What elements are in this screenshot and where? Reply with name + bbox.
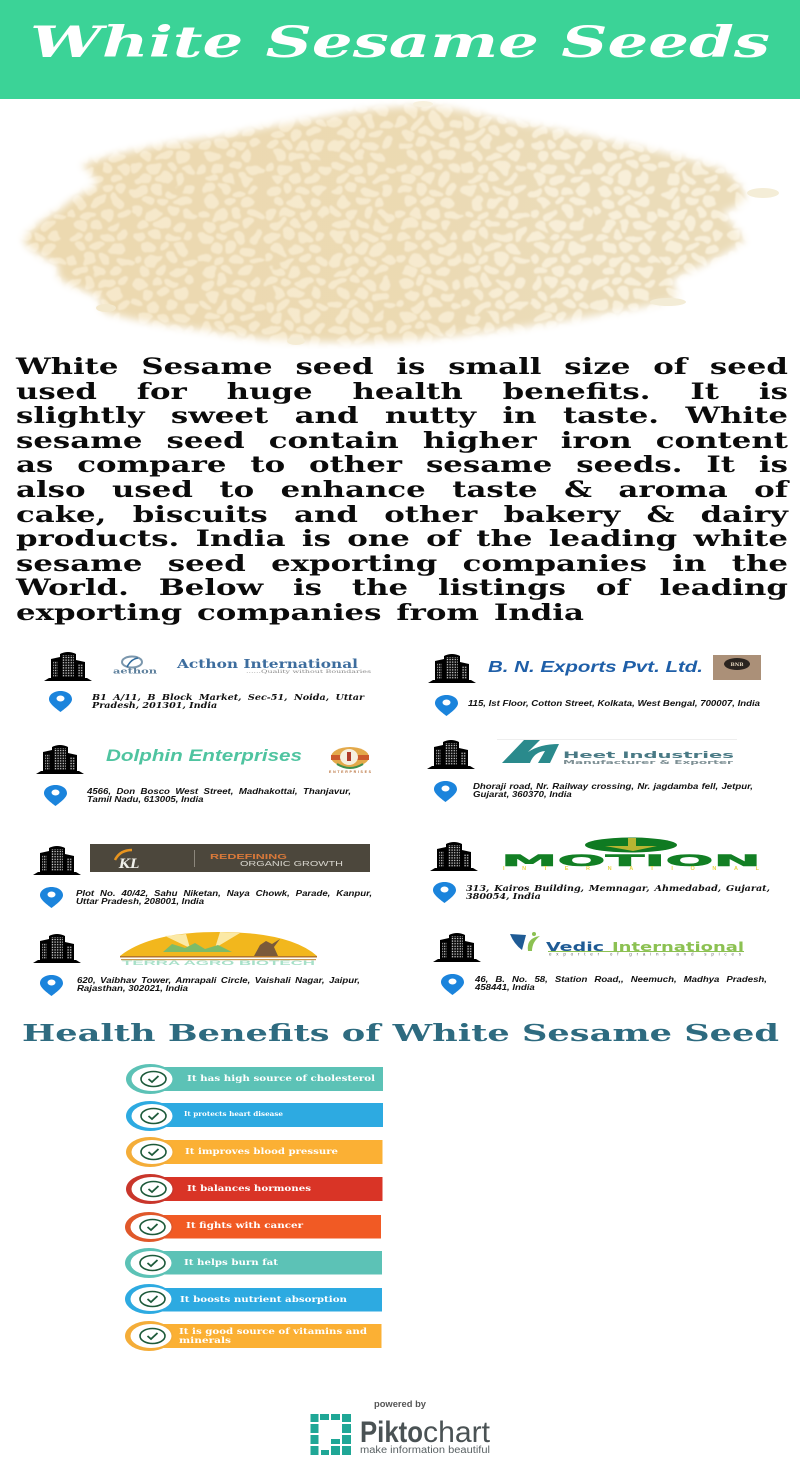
benefit 6: It helps burn fat [184, 1257, 278, 1267]
footer: powered by Piktochart [310, 1399, 491, 1456]
panel: Dolphin Enterprises [36, 745, 372, 806]
intro paragraph: sesame seed exporting companies in the [16, 551, 788, 577]
benefit 7: It boosts nutrient absorption [180, 1294, 347, 1304]
benefit 6 [125, 1248, 382, 1278]
benefit 1 [126, 1064, 383, 1094]
intro paragraph [16, 354, 790, 626]
title banner [0, 0, 800, 99]
panel: benefits list [125, 1064, 383, 1351]
address: Gujarat, 360370, India [473, 790, 572, 799]
title banner: White Sesame Seeds [30, 18, 770, 68]
panel: Heet Industries: Heet Industries [563, 751, 734, 761]
panel: B. N. Exports: B. N. Exports Pvt. Ltd. [488, 659, 703, 676]
address: 380054, India [466, 891, 541, 901]
benefit 3: It improves blood pressure [185, 1146, 338, 1156]
address [77, 976, 360, 993]
panel: Vedic International: International [612, 940, 744, 954]
panel: KL Agro [33, 844, 372, 908]
benefit 7 [125, 1284, 382, 1314]
panel: Vedic International: Vedic [546, 940, 604, 954]
heading: health benefits: Health Benefits of White Sesame Seed [22, 1020, 779, 1047]
panel: B. N. Exports: BNB [730, 662, 744, 668]
address [92, 692, 365, 710]
intro paragraph: products. India is one of the leading white [16, 526, 788, 552]
intro paragraph: used for huge health benefits. It is [16, 379, 788, 405]
panel: KL Agro: ORGANIC GROWTH [240, 859, 343, 868]
panel: KL Agro: REDEFINING [210, 852, 287, 861]
panel: Terra Agro Biotech [33, 932, 360, 996]
footer: powered by Piktochart: powered by [374, 1399, 427, 1410]
address: Tamil Nadu, 613005, India [87, 795, 203, 804]
panel: Aethon International [44, 652, 372, 712]
footer: powered by Piktochart: chart [423, 1416, 491, 1449]
benefit 8: minerals [179, 1335, 232, 1345]
panel: Motion International: INTERNATIONAL [503, 866, 760, 872]
panel: Dolphin Enterprises: ENTERPRISES [329, 770, 372, 774]
intro paragraph: also used to enhance taste & aroma of [16, 477, 788, 503]
intro paragraph: cake, biscuits and other bakery & dairy [16, 502, 788, 528]
panel: Terra Agro Biotech: TERRA AGRO BIOTECH [122, 961, 315, 967]
panel: KL Agro: KL [118, 857, 139, 872]
panel: Heet Industries: Manufacturer & Exporter [563, 760, 734, 766]
panel: Motion International: MOTION [501, 851, 761, 870]
panel: Dolphin Enterprises: Dolphin Enterprises [106, 746, 302, 765]
address: Plot No. 40/42, Sahu Niketan, Naya Chowk, Parade, Kanpur, [76, 889, 372, 898]
address: Dhoraji road, Nr. Railway crossing, Nr. jagdamba fell, Jetpur, [473, 782, 753, 791]
benefit 8: It is good source of vitamins and [179, 1326, 368, 1336]
panel: Vedic International: exporter of grains and spices [549, 952, 742, 956]
address: Rajasthan, 302021, India [77, 984, 188, 993]
address: Pradesh, 201301, India [92, 700, 217, 710]
address [474, 975, 767, 992]
address: 620, Vaibhav Tower, Amrapali Circle, Vaishali Nagar, Jaipur, [77, 976, 360, 985]
benefit 1: It has high source of cholesterol [187, 1073, 375, 1083]
photo: pile of white sesame seeds [20, 101, 779, 346]
benefit 3 [126, 1137, 382, 1167]
address [76, 889, 372, 906]
benefit 2: It protects heart disease [184, 1110, 283, 1118]
address: 115, Ist Floor, Cotton Street, Kolkata, West Bengal, 700007, India [468, 699, 760, 708]
panel: Motion International [430, 838, 770, 903]
intro paragraph: exporting companies from India [16, 600, 584, 626]
address [473, 782, 753, 799]
panel: B. N. Exports [428, 654, 761, 716]
panel: Vedic International [433, 932, 767, 995]
benefit 5: It fights with cancer [186, 1220, 304, 1230]
address: 458441, India [475, 983, 535, 992]
footer: powered by Piktochart: make information beautiful [360, 1445, 490, 1456]
benefit 8 [125, 1321, 382, 1351]
intro paragraph: sesame seed contain higher iron content [16, 428, 788, 454]
address: 4566, Don Bosco West Street, Madhakottai, Thanjavur, [87, 787, 351, 796]
benefit 2 [126, 1101, 383, 1131]
benefit 5 [125, 1212, 381, 1242]
intro paragraph: World. Below is the listings of leading [16, 575, 788, 601]
intro paragraph: White Sesame seed is small size of seed [16, 354, 788, 380]
address [466, 883, 770, 901]
benefit 4: It balances hormones [187, 1183, 312, 1193]
address: B1 A/11, B Block Market, Sec-51, Noida, Uttar [92, 692, 364, 702]
footer: powered by Piktochart: Pikto [360, 1416, 423, 1449]
panel: Aethon International: ......Quality without Boundaries [246, 669, 372, 675]
address [86, 787, 351, 804]
panel: Heet Industries [427, 739, 753, 802]
address: 46, B. No. 58, Station Road,, Neemuch, Madhya Pradesh, [475, 975, 767, 984]
intro paragraph: as compare to other sesame seeds. It is [16, 452, 788, 478]
icon: Piktochart logo [310, 1414, 351, 1455]
panel: Aethon International: aethon [113, 666, 158, 676]
benefit 4 [126, 1174, 382, 1204]
panel: Aethon International: Acthon International [176, 657, 359, 671]
address: 313, Kairos Building, Memnagar, Ahmedabad, Gujarat, [466, 883, 770, 893]
intro paragraph: slightly sweet and nutty in taste. White [16, 403, 788, 429]
address: Uttar Pradesh, 208001, India [76, 897, 204, 906]
